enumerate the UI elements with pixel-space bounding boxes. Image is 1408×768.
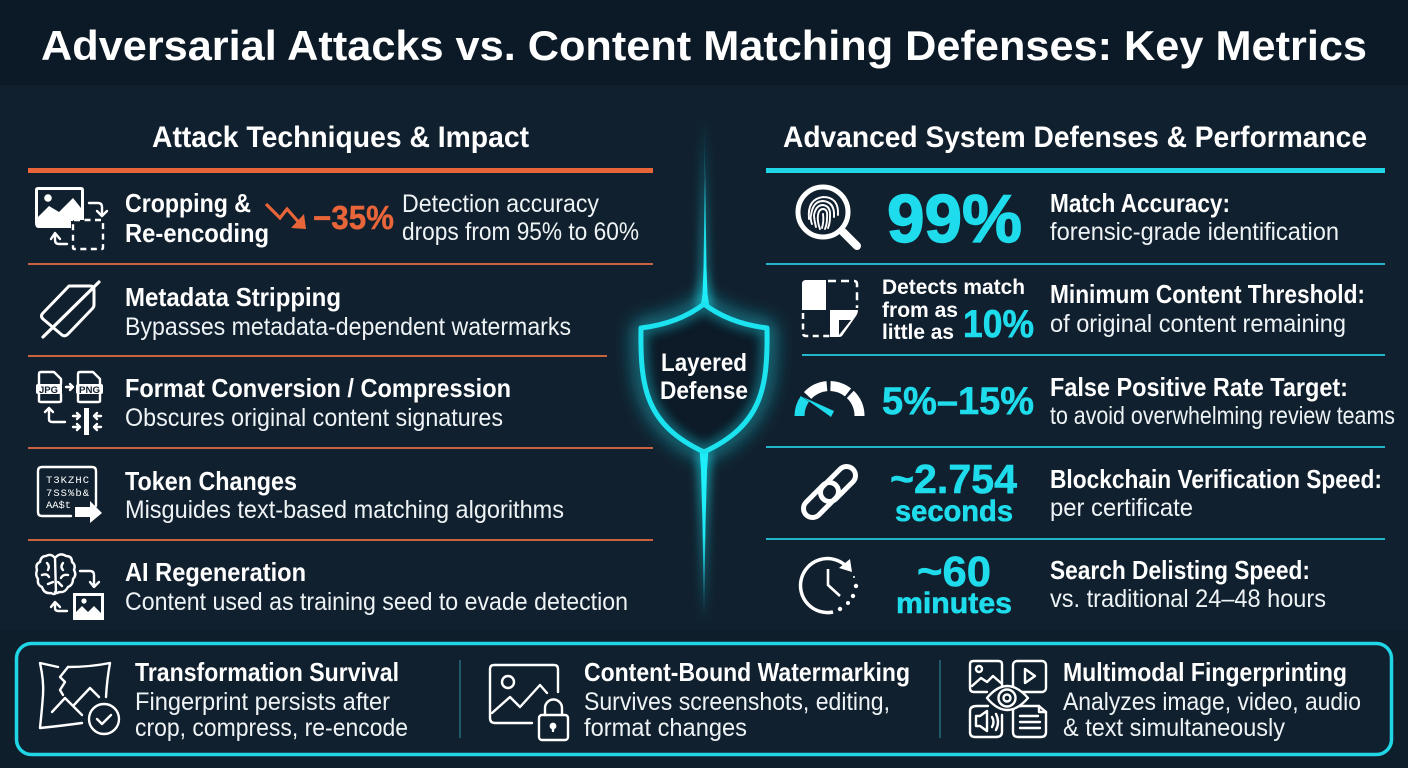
text: minimum content threshold: of original content remaining <box>1050 310 1346 338</box>
icon: gauge <box>800 386 860 417</box>
text: content-bound watermarking: Survives screenshots, editing, <box>584 688 890 716</box>
text: content-bound watermarking: format changes <box>584 714 747 742</box>
text: transformation survival: Fingerprint persists after <box>135 688 390 716</box>
metric: 60 minutes <box>896 548 1012 620</box>
text: false positive rate <box>1050 372 1395 430</box>
heading: system defenses: Advanced System Defenses & Performance <box>783 121 1367 154</box>
text: search delisting speed: Search Delisting Speed: <box>1050 555 1310 585</box>
icon: token changes: T3KZHC <box>46 475 89 487</box>
text: format conversion: Format Conversion / Compression <box>125 373 511 403</box>
text: transformation survival <box>135 657 408 742</box>
text: token changes: Token Changes <box>125 466 297 496</box>
text: transformation survival: Transformation Survival <box>135 657 399 687</box>
text: content-bound watermarking <box>584 657 910 742</box>
text: content-bound watermarking: Content-Bound Watermarking <box>584 657 910 687</box>
text: multimodal fingerprinting: Analyzes image, video, audio <box>1063 688 1361 716</box>
metric: 99 percent: 99% <box>887 181 1022 257</box>
metric: detects match from 10 percent: from as <box>882 299 958 322</box>
icon: falling arrow <box>266 204 306 229</box>
icon: content-bound watermark <box>490 665 568 740</box>
text: metadata stripping: Bypasses metadata-dependent watermarks <box>125 313 571 341</box>
text: match accuracy <box>1050 188 1339 246</box>
metric: 60 minutes: minutes <box>896 587 1012 620</box>
text: AI regeneration <box>125 557 628 616</box>
icon: fingerprint magnifier <box>798 187 857 246</box>
text: cropping and re-encoding <box>125 188 269 248</box>
icon: token changes: 7SS%b& <box>46 488 90 500</box>
text: layered defense <box>660 349 748 405</box>
metric: minus 35 percent: −35% <box>313 199 394 236</box>
panel: attack techniques <box>28 121 653 620</box>
text: detection accuracy: Detection accuracy <box>402 190 599 218</box>
text: AI regeneration: AI Regeneration <box>125 557 306 587</box>
icon: token changes: AA$t <box>46 500 71 512</box>
text: detection accuracy <box>402 190 639 246</box>
icon: chain link <box>800 463 859 521</box>
text: search delisting speed <box>1050 555 1326 613</box>
panel: bottom capabilities <box>16 644 1392 754</box>
text: minimum content threshold <box>1050 279 1365 338</box>
icon: token changes <box>38 467 102 523</box>
metric: detects match from 10 percent: Detects match <box>882 276 1025 299</box>
central layered defense shield <box>641 118 767 622</box>
text: token changes <box>125 466 564 524</box>
metric: 5 to 15 percent: 5%–15% <box>882 380 1034 423</box>
text: token changes: Misguides text-based matching algorithms <box>125 496 564 524</box>
text: match accuracy: forensic-grade identification <box>1050 218 1339 246</box>
text: multimodal fingerprinting: Multimodal Fingerprinting <box>1063 657 1347 687</box>
text: layered defense: Defense <box>660 377 748 405</box>
metric: 60 minutes: ~60 <box>917 548 991 596</box>
title: Adversarial Attacks vs. Content Matching Defenses: Key Metrics <box>41 22 1367 69</box>
text: cropping and re-encoding: Re-encoding <box>125 218 269 248</box>
text: blockchain verification speed: per certificate <box>1050 494 1193 522</box>
metric: 2.754 seconds: seconds <box>895 495 1013 528</box>
metric: detects match from 10 percent: 10% <box>963 303 1034 346</box>
text: minimum content threshold: Minimum Content Threshold: <box>1050 279 1365 309</box>
text: detection accuracy: drops from 95% to 60% <box>402 218 639 246</box>
heading: attack techniques: Attack Techniques & Impact <box>152 121 529 154</box>
text: format conversion: Obscures original content signatures <box>125 404 503 432</box>
icon: format conversion: PNG <box>79 385 100 396</box>
icon: transformation survival <box>40 663 119 734</box>
text: metadata stripping <box>125 282 571 341</box>
text: match accuracy: Match Accuracy: <box>1050 188 1230 218</box>
text: search delisting speed: vs. traditional 24–48 hours <box>1050 585 1326 613</box>
icon: format conversion <box>36 372 103 435</box>
text: metadata stripping: Metadata Stripping <box>125 282 341 312</box>
text: false positive rate: False Positive Rate Target: <box>1050 372 1348 402</box>
metric: detects match from 10 percent: little as <box>882 321 954 344</box>
icon: struck tag <box>42 282 99 337</box>
icon: format conversion: JPG <box>39 385 58 396</box>
metric: 2.754 seconds: ~2.754 <box>890 456 1017 502</box>
panel: system defenses <box>766 121 1395 620</box>
text: format conversion <box>125 373 511 432</box>
text: blockchain verification speed <box>1050 464 1382 522</box>
icon: AI brain <box>36 554 104 620</box>
metric: 2.754 seconds <box>890 456 1017 528</box>
text: multimodal fingerprinting: & text simultaneously <box>1063 714 1285 742</box>
text: layered defense: Layered <box>661 349 747 377</box>
icon: clock <box>801 559 858 613</box>
text: transformation survival: crop, compress, re-encode <box>135 714 408 742</box>
icon: partial content <box>802 280 858 337</box>
icon: multimodal <box>970 661 1046 737</box>
text: AI regeneration: Content used as training seed to evade detection <box>125 588 628 616</box>
text: cropping and re-encoding: Cropping & <box>125 188 251 218</box>
icon: image crop <box>35 187 107 249</box>
text: multimodal fingerprinting <box>1063 657 1361 742</box>
metric: detects match from 10 percent <box>882 276 1034 346</box>
